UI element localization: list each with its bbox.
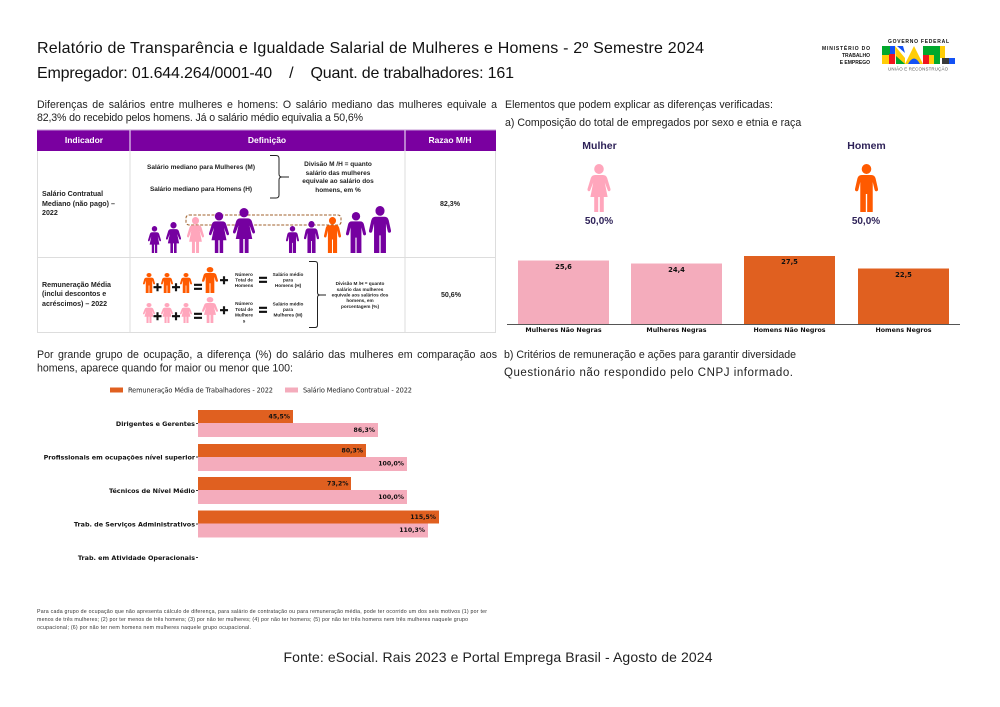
row 2 men equation: para <box>283 278 293 282</box>
row 2 men equation: Salário médio <box>273 272 304 277</box>
bar: mulheres negras <box>631 264 722 334</box>
group: profissionais <box>44 444 407 471</box>
panel: homem <box>847 140 886 227</box>
source: Fonte: eSocial. Rais 2023 e Portal Emprega Brasil - Agosto de 2024 <box>284 649 713 665</box>
occupation text: homens, aparece quando for maior ou menor que 100: <box>37 362 293 374</box>
row 2 brace <box>309 262 326 328</box>
panel: homem: Homem <box>847 140 886 152</box>
occupation text <box>37 349 497 374</box>
panel: mulher <box>582 140 617 227</box>
brasil blocks <box>882 46 955 64</box>
intro text left: 82,3% do recebido pelos homens. Já o salário médio equivalia a 50,6% <box>37 112 364 124</box>
group: técnicos: Técnicos de Nível Médio <box>109 487 196 495</box>
row 2 division note: salário das mulheres <box>337 287 384 292</box>
panel: mulher: Mulher <box>582 140 617 152</box>
footnote: menos de três mulheres; (2) por ter menos de três homens; (3) por não ter mulheres; (4) por não ter homens; (5) por não ter três homens nem três mulheres naquele grupo <box>37 617 468 623</box>
group: serviços administrativos: 110,3% <box>399 527 425 534</box>
table header <box>37 130 496 151</box>
group: profissionais: 80,3% <box>342 448 363 454</box>
row 1 division note: homens, em % <box>315 187 361 194</box>
group: serviços administrativos: 115,5% <box>410 514 436 521</box>
row 1 division note: Divisão M /H = quanto <box>304 161 372 168</box>
intro text left: Diferenças de salários entre mulheres e homens: O salário mediano das mulheres equivale a <box>37 99 497 111</box>
row 2 men equation: + <box>220 272 229 289</box>
governo federal label: GOVERNO FEDERAL <box>888 39 949 45</box>
row 2 women equation: Salário médio <box>273 302 304 306</box>
row 2 division note <box>332 281 389 309</box>
table header: Definição <box>248 135 286 145</box>
icons: women row <box>148 208 255 253</box>
row 2 women equation: s <box>243 318 246 324</box>
row 1 value: 82,3% <box>440 200 461 208</box>
bar: homens negros: Homens Negros <box>875 327 932 334</box>
legend: salário mediano: Salário Mediano Contratual - 2022 <box>303 386 412 394</box>
row 1 indicator <box>42 190 115 217</box>
bar: mulheres negras: Mulheres Negras <box>646 327 707 334</box>
bar: mulheres negras: 24,4 <box>668 266 685 274</box>
row 2 women equation: + <box>172 308 181 325</box>
row 2 indicator: (inclui descontos e <box>42 290 106 298</box>
bar: homens não negros <box>744 256 835 334</box>
row 1 salary labels <box>147 164 255 193</box>
icons: men row <box>286 206 391 253</box>
table header: Razao M/H <box>429 135 471 145</box>
row 2 women equation: Total de <box>235 307 253 312</box>
group: técnicos: 73,2% <box>327 480 348 488</box>
title: Relatório de Transparência e Igualdade Salarial de Mulheres e Homens - 2º Semestre 2024 <box>37 40 704 57</box>
group: serviços administrativos: Trab. de Serviços Administrativos <box>74 520 195 528</box>
row 2 women equation: para <box>283 307 293 312</box>
row 2 division note: homens, em <box>346 298 374 303</box>
footnote: ocupacional; (6) por não ter nem homens nem mulheres naquele grupo ocupacional. <box>37 625 251 631</box>
row 2 men equation: Total de <box>235 278 253 282</box>
logo: ministério and governo federal <box>822 39 955 72</box>
row 2 women equation: + <box>153 308 162 325</box>
row 2 men equation: = <box>194 279 203 296</box>
footnote: Para cada grupo de ocupação que não apresenta cálculo de diferença, para salário de contratação ou para remuneração média, pode ter ocorrido um dos seis motivos (1) por ter <box>37 609 487 615</box>
bar: homens não negros: Homens Não Negros <box>753 327 826 334</box>
row 2 division note: Divisão M /H = quanto <box>336 281 385 286</box>
row 1 division note <box>302 161 374 194</box>
row 1 division note: equivale ao salário dos <box>302 178 374 185</box>
heading right: Elementos que podem explicar as diferenças verificadas: <box>505 99 773 111</box>
row 2 men equation <box>143 267 304 296</box>
row 2 women equation: = <box>194 308 203 325</box>
table grid <box>37 151 496 332</box>
row 2 men equation: + <box>153 279 162 296</box>
row 2 division note: equivale aos salários dos <box>332 292 389 298</box>
occupation text: Por grande grupo de ocupação, a diferença (%) do salário das mulheres em comparação aos <box>37 349 497 361</box>
row 2 men equation: + <box>172 279 181 296</box>
row 2 women equation: + <box>220 302 229 319</box>
footnote <box>37 609 487 631</box>
group: técnicos: 100,0% <box>378 494 404 501</box>
subheading b: b) Critérios de remuneração e ações para garantir diversidade <box>504 349 796 361</box>
row 1 brace <box>270 156 289 198</box>
row 2 women equation <box>143 297 304 325</box>
row 1 salary labels: Salário mediano para Homens (H) <box>150 186 252 193</box>
row 2 women equation: Mulhere <box>235 312 253 318</box>
group: dirigentes e gerentes: 45,5% <box>269 414 290 420</box>
row 2 division note: porcentagem (%) <box>341 304 379 309</box>
bar: mulheres não negras <box>518 260 609 334</box>
slogan: UNIÃO E RECONSTRUÇÃO <box>888 66 949 72</box>
row 1 dashed highlight <box>186 215 341 225</box>
group: técnicos <box>109 477 407 504</box>
ministry name: MINISTÉRIO DO <box>822 44 870 52</box>
row 2 men equation: Homens (H) <box>275 283 302 288</box>
group: dirigentes e gerentes: Dirigentes e Gerentes <box>116 420 195 428</box>
intro text left <box>37 99 497 124</box>
row 1 indicator: Salário Contratual <box>42 190 103 198</box>
group: profissionais: Profissionais em ocupações nível superior <box>44 454 196 462</box>
group: atividade operacionais: Trab. em Atividade Operacionais <box>78 554 195 562</box>
bar: mulheres não negras: 25,6 <box>555 263 572 271</box>
row 1 division note: salário das mulheres <box>306 170 371 177</box>
group: profissionais: 100,0% <box>378 460 404 468</box>
group: dirigentes e gerentes: 86,3% <box>354 427 375 434</box>
legend: remuneração média: Remuneração Média de Trabalhadores - 2022 <box>128 386 273 394</box>
panel: homem: 50,0% <box>852 216 880 227</box>
row 2 men equation: = <box>259 272 268 289</box>
ministry name: TRABALHO <box>842 53 870 59</box>
row 1 indicator: Mediano (não pago) – <box>42 200 115 208</box>
row 1 salary labels: Salário mediano para Mulheres (M) <box>147 164 255 171</box>
row 2 women equation: = <box>259 302 268 319</box>
panel: mulher: 50,0% <box>585 216 613 227</box>
bar: homens não negros: 27,5 <box>781 258 798 266</box>
ministry name <box>822 44 870 66</box>
row 2 indicator: acréscimos) – 2022 <box>42 300 107 308</box>
title <box>37 40 704 82</box>
bar: homens negros: 22,5 <box>895 271 912 279</box>
subheading a: a) Composição do total de empregados por sexo e etnia e raça <box>505 117 801 129</box>
bar: mulheres não negras: Mulheres Não Negras <box>525 327 602 334</box>
title: Empregador: 01.644.264/0001-40 / Quant. de trabalhadores: 161 <box>37 65 514 82</box>
row 2 men equation: Homens <box>235 283 254 288</box>
icon: woman <box>587 164 611 212</box>
row 2 women equation: Mulheres (M) <box>274 312 303 318</box>
row 2 indicator <box>42 281 111 308</box>
ministry name: E EMPREGO <box>840 60 870 66</box>
bar chart: composition <box>507 256 960 334</box>
row 2 indicator: Remuneração Média <box>42 281 111 289</box>
group: serviços administrativos <box>74 510 439 538</box>
panel: indicator table <box>37 130 496 332</box>
bar: homens negros <box>858 268 949 334</box>
row 2 women equation: Número <box>235 301 253 306</box>
group: dirigentes e gerentes <box>116 410 378 437</box>
row 2 men equation: Número <box>235 272 253 277</box>
bar chart: occupation groups <box>44 410 439 562</box>
row 1 indicator: 2022 <box>42 209 58 217</box>
table header: Indicador <box>65 135 104 145</box>
row 2 value: 50,6% <box>441 291 462 299</box>
legend <box>110 386 412 394</box>
questionnaire note: Questionário não respondido pelo CNPJ informado. <box>504 367 793 379</box>
icon: man <box>855 164 878 212</box>
